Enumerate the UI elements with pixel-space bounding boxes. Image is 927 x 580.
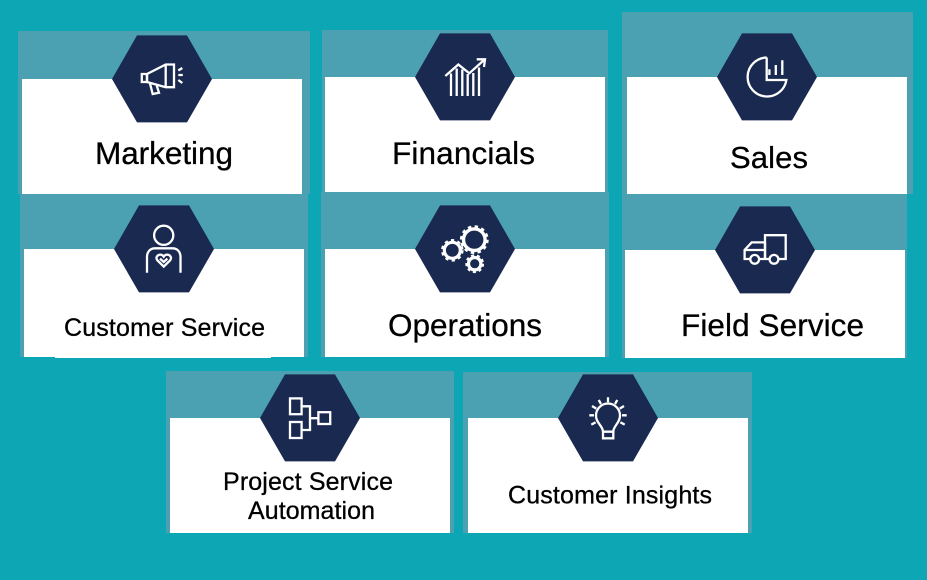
hexagon: Customer Service [114, 205, 214, 292]
panel: Marketing header band [18, 31, 310, 194]
panel: Customer Service header band [20, 194, 308, 357]
label: Sales: Sales [730, 140, 808, 175]
label: Financials: Financials [392, 135, 535, 171]
panel: Field Service header band [622, 194, 907, 358]
icon: light bulb [589, 397, 627, 438]
label: Customer Service: Customer Service [64, 314, 265, 342]
panel: Customer Insights body [468, 418, 748, 533]
icon: pie chart with bars [748, 58, 786, 96]
panel: Sales header band [622, 12, 913, 194]
panel: Field Service body [625, 250, 905, 358]
icon: megaphone [142, 64, 183, 94]
panel: Financials body [325, 77, 605, 192]
hexagon: Project Service Automation [260, 374, 360, 461]
hexagon: Marketing [112, 35, 212, 122]
card: Customer Insights [463, 372, 752, 533]
hexagon: Field Service [715, 206, 815, 293]
card: Financials [322, 30, 608, 192]
label: Marketing: Marketing [95, 135, 233, 171]
panel: Sales body [627, 77, 907, 194]
label: Field Service: Field Service [681, 307, 864, 343]
panel: Operations header band [321, 192, 609, 357]
hexagon: Operations [415, 205, 515, 292]
label: Customer Insights: Customer Insights [508, 482, 712, 510]
hexagon: Customer Insights [558, 374, 658, 461]
panel: Project Service Automation header band [166, 371, 454, 533]
card: Sales [622, 12, 913, 194]
icon: growth chart [445, 59, 485, 96]
panel: Customer Service body [24, 249, 304, 358]
icon: delivery truck [745, 235, 786, 264]
hexagon: Financials [415, 33, 515, 120]
panel: Project Service Automation body [170, 418, 450, 533]
card: Marketing [18, 31, 310, 194]
hexagon: Sales [717, 33, 817, 120]
icon: flow diagram [290, 398, 330, 438]
label: Project Service Automation [223, 468, 393, 525]
card: Operations [321, 192, 609, 357]
card: Project Service Automation [166, 371, 454, 533]
label: Project Service Automation: Automation [248, 497, 375, 525]
label: Operations: Operations [388, 307, 542, 343]
panel: Marketing body [22, 79, 302, 194]
icon: gears [442, 227, 487, 272]
panel: Customer Insights header band [463, 372, 752, 533]
card: Field Service [622, 194, 907, 358]
card: Customer Service [20, 194, 308, 358]
panel: Financials header band [322, 30, 608, 192]
panel: Operations body [325, 249, 605, 357]
label: Project Service Automation: Project Service [223, 468, 393, 496]
icon: person with heart [147, 226, 180, 273]
